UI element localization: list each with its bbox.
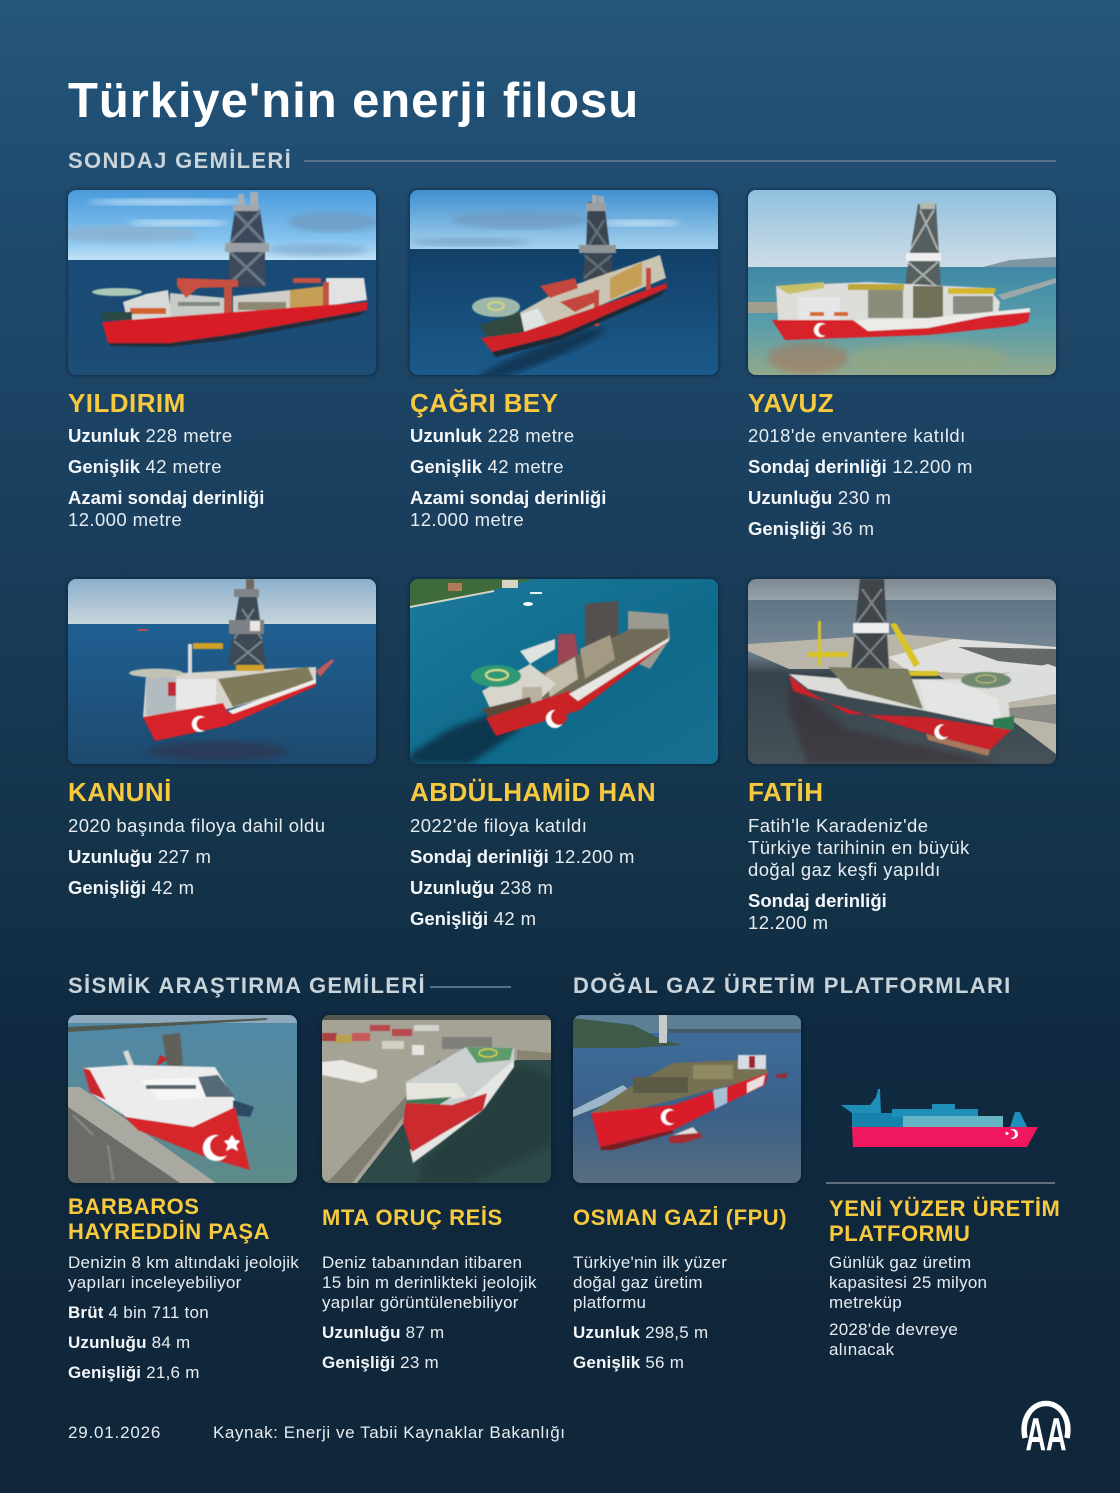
name xyxy=(68,1194,270,1244)
name: OSMAN GAZİ (FPU) xyxy=(573,1205,787,1230)
name: YENİ YÜZER ÜRETİM xyxy=(829,1196,1060,1221)
photo: MTA Oruç Reis ship xyxy=(322,1015,551,1183)
name: BARBAROS xyxy=(68,1194,200,1219)
specs: 2022'de filoya katıldı xyxy=(410,815,587,836)
section heading: doğal gaz üretim platformları: DOĞAL GAZ ÜRETİM PLATFORMLARI xyxy=(573,973,1012,998)
photo: Çağrı Bey ship xyxy=(410,190,718,375)
specs: yapılar görüntülenebiliyor xyxy=(322,1293,519,1312)
specs xyxy=(410,815,635,929)
specs: Deniz tabanından itibaren xyxy=(322,1253,522,1272)
illustration: platform ship xyxy=(841,1089,1038,1147)
specs: 12.000 metre xyxy=(410,509,524,530)
specs: 2028'de devreye xyxy=(829,1320,958,1339)
specs: doğal gaz keşfi yapıldı xyxy=(748,859,941,880)
specs: Sondaj derinliği 12.200 m xyxy=(748,456,973,477)
specs: Sondaj derinliği xyxy=(748,890,887,911)
panel: MTA Oruç Reis xyxy=(321,1014,552,1372)
photo: Abdülhamid Han ship xyxy=(410,579,718,764)
specs: yapıları inceleyebiliyor xyxy=(68,1273,241,1292)
specs: Brüt 4 bin 711 ton xyxy=(68,1303,209,1322)
specs: Genişliği 42 m xyxy=(68,877,195,898)
panel: Barbaros Hayreddin Paşa xyxy=(67,1014,299,1382)
specs: metreküp xyxy=(829,1293,902,1312)
panel: Çağrı Bey xyxy=(408,188,720,530)
section heading: sismik araştırma gemileri: SİSMİK ARAŞTIRMA GEMİLERİ xyxy=(68,973,426,998)
panel: Kanuni xyxy=(66,577,378,898)
panel: Osman Gazi xyxy=(572,1014,802,1372)
specs: 12.200 m xyxy=(748,912,828,933)
photo: Barbaros Hayreddin Paşa ship xyxy=(68,1015,297,1183)
footer: source: Kaynak: Enerji ve Tabii Kaynaklar Bakanlığı xyxy=(213,1423,566,1442)
specs: Azami sondaj derinliği xyxy=(68,487,264,508)
specs: Azami sondaj derinliği xyxy=(410,487,606,508)
specs: Türkiye'nin ilk yüzer xyxy=(573,1253,727,1272)
specs: platformu xyxy=(573,1293,646,1312)
photo: Osman Gazi FPU xyxy=(573,1015,801,1183)
specs: Genişliği 42 m xyxy=(410,908,537,929)
specs: 15 bin m derinlikteki jeolojik xyxy=(322,1273,537,1292)
specs: 2018'de envantere katıldı xyxy=(748,425,966,446)
specs: Uzunluk 228 metre xyxy=(68,425,233,446)
panel: Yavuz xyxy=(746,188,1058,539)
specs: Genişlik 42 metre xyxy=(68,456,222,477)
name: MTA ORUÇ REİS xyxy=(322,1205,503,1230)
specs xyxy=(573,1253,727,1372)
specs: kapasitesi 25 milyon xyxy=(829,1273,987,1292)
footer: date: 29.01.2026 xyxy=(68,1423,161,1442)
panel: Fatih xyxy=(746,577,1058,933)
specs: alınacak xyxy=(829,1340,894,1359)
specs xyxy=(748,425,973,539)
specs xyxy=(829,1253,987,1359)
specs: Genişliği 21,6 m xyxy=(68,1363,200,1382)
name xyxy=(829,1196,1060,1246)
specs: Uzunluğu 230 m xyxy=(748,487,891,508)
specs: Genişliği 36 m xyxy=(748,518,875,539)
section heading: sondaj gemileri: SONDAJ GEMİLERİ xyxy=(68,148,292,173)
panel: Yeni Yüzer Üretim Platformu xyxy=(826,1089,1060,1359)
specs: Uzunluğu 238 m xyxy=(410,877,553,898)
name: YAVUZ xyxy=(748,388,834,418)
specs: Türkiye tarihinin en büyük xyxy=(748,837,970,858)
specs: Denizin 8 km altındaki jeolojik xyxy=(68,1253,299,1272)
name: HAYREDDİN PAŞA xyxy=(68,1219,270,1244)
specs: Uzunluğu 87 m xyxy=(322,1323,444,1342)
specs xyxy=(68,1253,299,1382)
photo: Fatih ship xyxy=(748,579,1056,764)
panel: Abdülhamid Han xyxy=(408,577,720,929)
title: Türkiye'nin enerji filosu xyxy=(68,74,639,128)
specs xyxy=(68,425,264,530)
specs: 2020 başında filoya dahil oldu xyxy=(68,815,325,836)
specs: Uzunluk 228 metre xyxy=(410,425,575,446)
specs xyxy=(68,815,325,898)
specs: Uzunluğu 84 m xyxy=(68,1333,190,1352)
specs: Uzunluk 298,5 m xyxy=(573,1323,708,1342)
specs xyxy=(322,1253,537,1372)
specs: doğal gaz üretim xyxy=(573,1273,703,1292)
specs: Uzunluğu 227 m xyxy=(68,846,211,867)
name: ABDÜLHAMİD HAN xyxy=(410,777,656,807)
photo: Yavuz ship xyxy=(748,190,1056,375)
specs: Genişlik 56 m xyxy=(573,1353,684,1372)
name: PLATFORMU xyxy=(829,1221,970,1246)
specs: 12.000 metre xyxy=(68,509,182,530)
name: ÇAĞRI BEY xyxy=(410,388,559,418)
specs: Fatih'le Karadeniz'de xyxy=(748,815,928,836)
specs xyxy=(410,425,606,530)
name: KANUNİ xyxy=(68,777,172,807)
specs: Genişliği 23 m xyxy=(322,1353,439,1372)
photo: Yıldırım ship xyxy=(68,190,376,375)
panel: Yıldırım xyxy=(66,188,378,530)
specs: Günlük gaz üretim xyxy=(829,1253,971,1272)
photo: Kanuni ship xyxy=(68,579,376,764)
specs xyxy=(748,815,970,933)
name: FATİH xyxy=(748,777,823,807)
specs: Genişlik 42 metre xyxy=(410,456,564,477)
specs: Sondaj derinliği 12.200 m xyxy=(410,846,635,867)
name: YILDIRIM xyxy=(68,388,186,418)
